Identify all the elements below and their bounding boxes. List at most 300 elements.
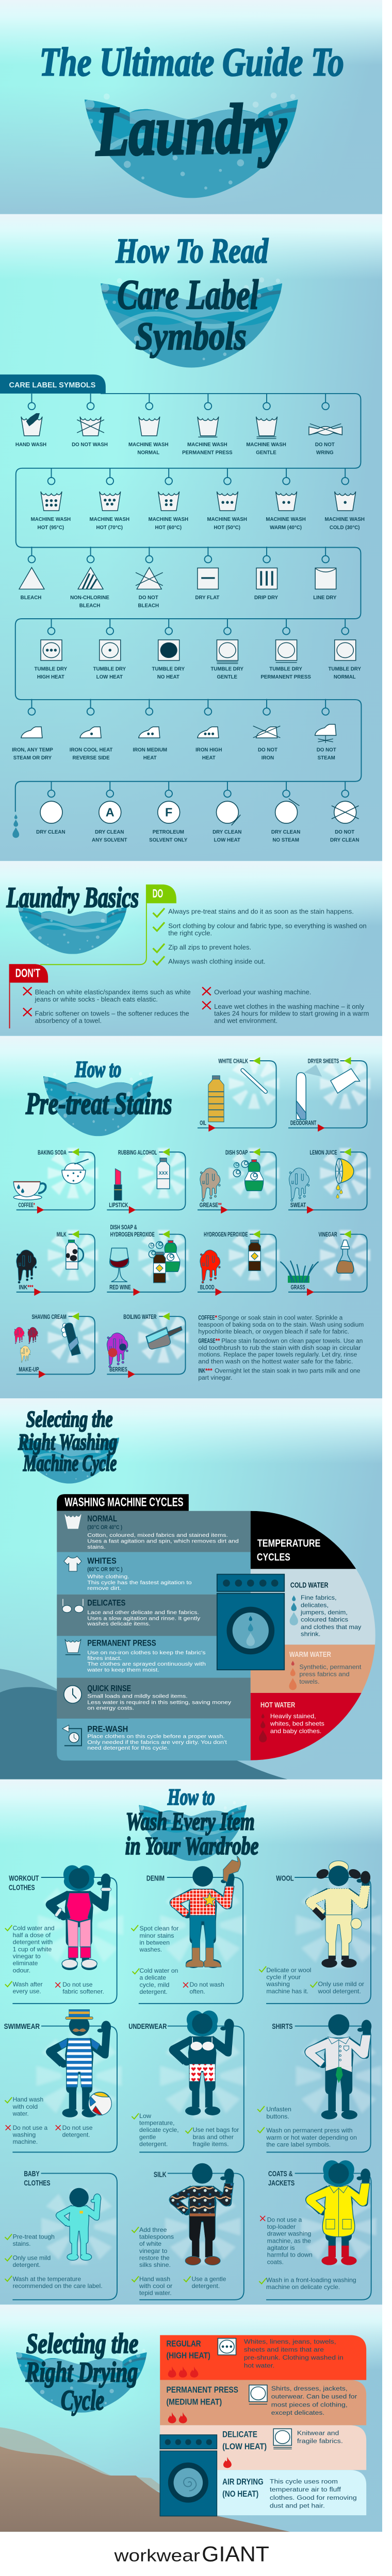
hills bbox=[0, 2427, 290, 2532]
card: silk: Add three bbox=[139, 2227, 167, 2233]
row: delicates: Uses a slow agitation and rinse. It gently bbox=[87, 1616, 201, 1621]
symbol: do not wring bbox=[309, 423, 342, 455]
card: baby clothes: Pre-treat tough bbox=[13, 2233, 55, 2240]
card: shirts: SHIRTS bbox=[272, 2022, 292, 2031]
icon: lemon bbox=[336, 1159, 354, 1198]
icon: three flames bbox=[168, 2366, 198, 2378]
row: delicates: DELICATES bbox=[87, 1598, 125, 1608]
row: iron symbols: HEAT bbox=[202, 755, 216, 761]
row: delicate low heat: Knitwear and bbox=[297, 2429, 339, 2436]
card: sweat and lemon juice bbox=[288, 1148, 367, 1214]
row: dry clean symbols: LOW HEAT bbox=[214, 838, 240, 843]
header: washing machine cycles bbox=[57, 1494, 189, 1511]
notes: stain instructions: INK bbox=[198, 1367, 205, 1374]
row: normal: NORMAL bbox=[87, 1514, 117, 1523]
row: regular high heat: (HIGH HEAT) bbox=[167, 2350, 210, 2360]
figure: coat outfit bbox=[305, 2160, 370, 2265]
red connector bbox=[9, 982, 10, 1028]
card: shirts: Wash on permanent press with bbox=[266, 2127, 353, 2134]
notes: stain instructions: Overnight let the stain soak in two parts milk and one bbox=[215, 1367, 361, 1374]
row: bleach and drying symbols: NON-CHLORINE bbox=[70, 595, 109, 601]
row: dry clean symbols: SOLVENT ONLY bbox=[149, 838, 188, 843]
card: red wine and dish soap with hydrogen peroxide: HYDROGEN PEROXIDE bbox=[110, 1231, 155, 1238]
card: underwear: Low bbox=[139, 2113, 152, 2120]
row: tumble dry symbols: TUMBLE DRY bbox=[328, 666, 361, 672]
segment: cold water: jumpers, denim, bbox=[300, 1609, 348, 1616]
icon: grease stain bbox=[200, 1168, 220, 1201]
segment: cold water: COLD WATER bbox=[290, 1582, 329, 1590]
card: silk: Use a gentle bbox=[192, 2276, 226, 2282]
row: pre-wash bbox=[57, 1719, 251, 1760]
tab: don't: DON'T bbox=[15, 967, 41, 980]
heading: selecting the right drying cycle: Selecting the bbox=[26, 2328, 138, 2359]
row: delicate low heat bbox=[160, 2425, 366, 2470]
list: don't items: Fabric softener on towels – the softener reduces the bbox=[35, 1010, 189, 1018]
row: tumble dry symbols bbox=[35, 619, 361, 680]
card: workout clothes: every use. bbox=[13, 1988, 41, 1995]
row: permanent press medium heat bbox=[160, 2380, 366, 2425]
row: bleach and drying symbols: BLEACH bbox=[79, 603, 100, 609]
row: regular high heat bbox=[160, 2335, 366, 2380]
heading: selecting the right washing machine cycle: Right Washing bbox=[18, 1429, 117, 1455]
notes: stain instructions: hypochlorite bleach, or oxygen bleach if safe for fabric. bbox=[198, 1328, 349, 1335]
row: quick rinse: Less water is required in this setting, saving money bbox=[87, 1700, 232, 1705]
card: silk bbox=[132, 2163, 244, 2300]
row: dry clean symbols: DRY CLEAN bbox=[213, 829, 241, 835]
card: underwear: gentle bbox=[139, 2134, 156, 2141]
card: grass and vinegar: GRASS bbox=[291, 1283, 305, 1291]
card: silk: vinegar to bbox=[139, 2248, 168, 2255]
row: tumble dry symbols: GENTLE bbox=[217, 674, 238, 680]
symbol: machine wash permanent press: MACHINE WASH bbox=[187, 442, 227, 448]
row: bleach and drying symbols: LINE DRY bbox=[313, 595, 337, 601]
tab: care label symbols: CARE LABEL SYMBOLS bbox=[9, 381, 96, 389]
row: permanent press: water to keep them moist. bbox=[87, 1667, 159, 1673]
row: dry clean symbols: DRY CLEAN bbox=[271, 829, 300, 835]
icon: water bowl bbox=[101, 277, 282, 368]
row: permanent press bbox=[57, 1636, 251, 1677]
sunburst backgrounds bbox=[36, 1883, 381, 2264]
card: red wine and dish soap with hydrogen peroxide: DISH SOAP & bbox=[110, 1224, 137, 1231]
icon: blood stain bbox=[200, 1250, 220, 1283]
footer: workwear giant logo bbox=[0, 2532, 382, 2576]
figure: baby outfit bbox=[56, 2188, 101, 2260]
card: red wine and dish soap with hydrogen peroxide bbox=[107, 1224, 185, 1296]
heading: selecting the right drying cycle: Cycle bbox=[61, 2384, 104, 2416]
row: iron symbols: STEAM bbox=[318, 755, 335, 761]
card: workout clothes: half a dose of bbox=[13, 1932, 51, 1939]
symbol: machine wash normal bbox=[128, 417, 169, 455]
card: underwear: delicate cycle, bbox=[139, 2127, 179, 2133]
row: delicate low heat: (LOW HEAT) bbox=[222, 2442, 267, 2451]
notes: stain instructions bbox=[198, 1314, 364, 1381]
heading: how to read: How To Read bbox=[116, 231, 269, 270]
row: temperature symbols: WARM (40°C) bbox=[270, 525, 302, 531]
card: silk: restore the bbox=[139, 2255, 170, 2261]
card: workout clothes: Wash after bbox=[13, 1981, 43, 1988]
card: silk: detergent. bbox=[192, 2283, 220, 2290]
row: air drying no heat: clothes. Good for removing bbox=[270, 2494, 357, 2501]
card: berries and boiling water: BERRIES bbox=[109, 1366, 127, 1373]
icon: water bowl bbox=[19, 1434, 119, 1484]
card: shirts: the care label symbols. bbox=[266, 2141, 331, 2148]
list: don't items: Overload your washing machine. bbox=[214, 989, 311, 996]
card: blood and hydrogen peroxide: HYDROGEN PEROXIDE bbox=[204, 1231, 248, 1238]
row: bleach and drying symbols bbox=[19, 547, 337, 609]
icon: spray bbox=[304, 1064, 322, 1077]
card: wool: washing bbox=[266, 1981, 290, 1988]
segment: cold water: Fine fabrics, bbox=[301, 1595, 337, 1601]
card: workout clothes: detergent with bbox=[13, 1939, 53, 1946]
row: iron symbols: IRON MEDIUM bbox=[133, 748, 167, 753]
icon: dryer machine bbox=[160, 2435, 217, 2516]
row: regular high heat: hot water. bbox=[244, 2362, 274, 2369]
row: regular high heat: sheets and items that are bbox=[244, 2346, 324, 2353]
row: delicates bbox=[57, 1595, 251, 1636]
card: workout clothes: Cold water and bbox=[13, 1925, 55, 1931]
figure: silk outfit bbox=[169, 2163, 234, 2265]
card: swimwear: detergent. bbox=[62, 2131, 90, 2138]
card: shirts bbox=[257, 2014, 371, 2152]
card: denim: cycle, mild bbox=[140, 1981, 169, 1988]
row: iron symbols: DO NOT bbox=[258, 748, 277, 753]
row: normal: Cotton, coloured, mixed fabrics and stained items. bbox=[87, 1533, 228, 1538]
icon: water drops bbox=[12, 815, 19, 838]
figure: underwear outfit bbox=[169, 2010, 234, 2115]
row: dry clean symbols: F bbox=[165, 805, 172, 819]
card: denim: Spot clean for bbox=[140, 1925, 178, 1932]
row: temperature symbols: MACHINE WASH bbox=[31, 517, 71, 522]
row: delicates: Lace and other delicate and fine fabrics. bbox=[87, 1610, 199, 1616]
list: do items: Sort clothing by colour and fabric type, so everything is washed on bbox=[168, 923, 367, 930]
row: temperature symbols: HOT (60°C) bbox=[155, 525, 182, 531]
symbol: machine wash permanent press bbox=[182, 417, 233, 455]
card: red wine and dish soap with hydrogen peroxide: RED WINE bbox=[109, 1283, 131, 1291]
card: workout clothes: fabric softener. bbox=[62, 1989, 104, 1995]
card: underwear: temperature, bbox=[139, 2120, 175, 2126]
tab: don't bbox=[9, 964, 48, 982]
heading: temperature cycles: TEMPERATURE bbox=[257, 1537, 320, 1549]
card: silk: tepid water. bbox=[139, 2290, 172, 2297]
row: whites: This cycle has the fastest agitation to bbox=[87, 1580, 192, 1586]
panel: care label symbols bbox=[0, 214, 382, 861]
row: whites: White clothing. bbox=[87, 1574, 129, 1580]
row: whites: (60°C OR 90°C ) bbox=[87, 1566, 123, 1572]
row: permanent press medium heat: most pieces of clothing, bbox=[271, 2401, 348, 2408]
card: underwear: UNDERWEAR bbox=[128, 2022, 167, 2031]
card: denim: Cold water on bbox=[140, 1968, 178, 1974]
panel: selecting the right washing machine cycle bbox=[0, 1398, 382, 1780]
row: air drying no heat: This cycle uses room bbox=[270, 2478, 338, 2485]
row: tumble dry symbols: TUMBLE DRY bbox=[210, 666, 244, 672]
card: baby clothes bbox=[5, 2170, 117, 2300]
card: make-up and shaving cream: SHAVING CREAM bbox=[31, 1313, 67, 1320]
icon: tub with line bbox=[65, 1639, 81, 1655]
list: don't items: Leave wet clothes in the washing machine – it only bbox=[214, 1003, 365, 1010]
row: permanent press medium heat: except delicates. bbox=[271, 2409, 324, 2416]
card: ink and milk: INK*** bbox=[19, 1283, 34, 1291]
row: temperature symbols: HOT (50°C) bbox=[214, 525, 240, 531]
card: wool: Only use mild or bbox=[318, 1981, 364, 1988]
row: quick rinse: on energy costs. bbox=[87, 1706, 134, 1711]
row: bleach and drying symbols: BLEACH bbox=[138, 603, 159, 609]
icon: t-shirt bbox=[64, 1556, 81, 1571]
heading: selecting the right washing machine cycle bbox=[18, 1406, 117, 1476]
card: oil and white chalk: OIL bbox=[200, 1119, 206, 1126]
list: do items: Always pre-treat stains and do it as soon as the stain happens. bbox=[168, 908, 354, 916]
icon: tub bbox=[65, 1515, 81, 1529]
row: air drying no heat: AIR DRYING bbox=[222, 2477, 264, 2487]
heading: wash every item in your wardrobe: Wash Every Item bbox=[126, 1807, 255, 1835]
figure: shirts outfit bbox=[304, 2014, 371, 2120]
symbol: machine wash normal: MACHINE WASH bbox=[128, 442, 169, 448]
header: washing machine cycles: WASHING MACHINE CYCLES bbox=[64, 1495, 184, 1509]
card: silk: SILK bbox=[154, 2170, 167, 2179]
card: wool: cycle if your bbox=[266, 1974, 301, 1981]
chart: temperature cycles half circle bbox=[251, 1511, 382, 1761]
figure: workout outfit bbox=[46, 1865, 111, 1970]
card: oil and white chalk bbox=[198, 1057, 276, 1132]
row: iron symbols: IRON HIGH bbox=[195, 748, 222, 753]
card: coats and jackets: JACKETS bbox=[268, 2179, 295, 2188]
list: do items bbox=[153, 908, 367, 965]
row: air drying no heat: (NO HEAT) bbox=[222, 2489, 258, 2499]
panel: how to wash every item in your wardrobe bbox=[0, 1780, 382, 2304]
segment: cold water: and clothes that may bbox=[301, 1624, 362, 1631]
panel: laundry basics bbox=[0, 861, 382, 1036]
row: iron symbols: IRON, ANY TEMP bbox=[12, 748, 53, 753]
row: whites bbox=[57, 1552, 251, 1595]
row: delicates: washes delicate items. bbox=[87, 1621, 151, 1627]
list: don't items bbox=[23, 987, 369, 1024]
row: tumble dry symbols: NO HEAT bbox=[157, 674, 179, 680]
icon: oil bottle bbox=[208, 1076, 224, 1122]
row: bleach and drying symbols: DO NOT bbox=[139, 595, 158, 601]
icon: lipstick bbox=[114, 1168, 122, 1200]
notes: stain instructions: teaspoon of baking soda on to the stain. Wash using sodium bbox=[198, 1321, 364, 1328]
row: dry clean symbols: PETROLEUM bbox=[153, 829, 184, 835]
icon: tumble dry gentle bbox=[273, 2429, 292, 2449]
card: coats and jackets: drawer washing bbox=[267, 2231, 311, 2238]
notes: stain instructions: and then wash on the hottest water safe for the fabric. bbox=[198, 1358, 353, 1365]
notes: stain instructions: old toothbrush to rub the stain with dish soap in circular bbox=[198, 1344, 361, 1351]
row: permanent press medium heat: Shirts, dresses, jackets, bbox=[271, 2385, 348, 2392]
heading: selecting the right drying cycle bbox=[25, 2328, 138, 2416]
segment: hot water: Heavily stained, bbox=[270, 1713, 316, 1720]
card: lipstick and rubbing alcohol: RUBBING ALCOHOL bbox=[118, 1149, 157, 1156]
card: sweat and lemon juice: SWEAT bbox=[290, 1201, 306, 1209]
row: tumble dry symbols: TUMBLE DRY bbox=[269, 666, 302, 672]
tab: care label symbols bbox=[0, 375, 106, 394]
card: denim bbox=[131, 1856, 243, 2004]
symbol: machine wash gentle: GENTLE bbox=[256, 450, 276, 455]
row: temperature symbols: HOT (95°C) bbox=[38, 525, 64, 531]
card: wool bbox=[259, 1861, 371, 2004]
symbol: do not wash bbox=[72, 417, 108, 448]
icon: hydrogen peroxide bbox=[249, 1240, 260, 1270]
row: regular high heat: REGULAR bbox=[167, 2339, 201, 2349]
heading: selecting the right washing machine cycle: Selecting the bbox=[26, 1406, 113, 1432]
icon: make-up stains bbox=[14, 1327, 38, 1362]
row: iron symbols: REVERSE SIDE bbox=[73, 755, 110, 761]
card: wool: Delicate or wool bbox=[266, 1967, 311, 1974]
card: deodorant and dryer sheets: DRYER SHEETS bbox=[308, 1057, 339, 1064]
symbol: do not wring: WRING bbox=[316, 450, 334, 455]
card: underwear: bras and other bbox=[193, 2134, 234, 2141]
card: silk: tablespoons bbox=[139, 2233, 174, 2240]
card: coats and jackets: Do not use a bbox=[267, 2216, 302, 2223]
row: dry clean symbols: DRY CLEAN bbox=[95, 829, 124, 835]
card: grass and vinegar: VINEGAR bbox=[319, 1231, 337, 1238]
card: denim: Do not wash bbox=[189, 1981, 224, 1988]
row: air drying no heat: temperature air to fluff bbox=[270, 2486, 341, 2493]
heading: selecting the right washing machine cycle: Machine Cycle bbox=[23, 1450, 117, 1476]
row: temperature symbols: MACHINE WASH bbox=[149, 517, 188, 522]
icon: ink stain bbox=[17, 1250, 37, 1283]
heading: selecting the right drying cycle: Right Drying bbox=[25, 2357, 138, 2388]
heading: wash every item in your wardrobe bbox=[125, 1807, 258, 1860]
card: blood and hydrogen peroxide: BLOOD bbox=[200, 1283, 215, 1291]
card: make-up and shaving cream bbox=[14, 1313, 95, 1378]
list: don't items: Bleach on white elastic/spandex items such as white bbox=[35, 989, 191, 996]
row: delicate low heat: DELICATE bbox=[222, 2429, 257, 2439]
row: dry clean symbols: DO NOT bbox=[335, 829, 354, 835]
card: swimwear: SWIMWEAR bbox=[4, 2022, 40, 2031]
card: grease and dish soap: GREASE** bbox=[200, 1201, 222, 1209]
row: normal bbox=[57, 1511, 251, 1552]
card: blood and hydrogen peroxide bbox=[198, 1230, 276, 1296]
segment: hot water: and baby clothes. bbox=[270, 1728, 321, 1735]
card: lipstick and rubbing alcohol: LIPSTICK bbox=[109, 1201, 128, 1209]
row: air drying no heat: dust and pet hair. bbox=[270, 2502, 325, 2509]
icon: wine glass bbox=[110, 1248, 129, 1282]
row: quick rinse: QUICK RINSE bbox=[87, 1683, 131, 1693]
icon: chalk bbox=[242, 1070, 266, 1092]
notes: stain instructions: motions. Replace the paper towels regularly. Let dry, rinse bbox=[198, 1351, 357, 1358]
heading: temperature cycles bbox=[257, 1537, 320, 1563]
notes: stain instructions: COFFEE bbox=[198, 1314, 215, 1321]
card: shirts: buttons. bbox=[266, 2113, 289, 2120]
row: normal: (30°C OR 40°C ) bbox=[87, 1524, 122, 1531]
icon: water bowl bbox=[18, 903, 127, 954]
symbol: do not wash: DO NOT WASH bbox=[72, 442, 108, 448]
card: silk: with cool or bbox=[139, 2283, 172, 2290]
card: lipstick and rubbing alcohol bbox=[107, 1148, 185, 1214]
card: grease and dish soap: DISH SOAP bbox=[225, 1149, 248, 1156]
hills bbox=[0, 1669, 288, 1780]
card: baby clothes: Wash at the temperature bbox=[13, 2276, 81, 2282]
tab: do bbox=[146, 885, 176, 903]
card: silk: silks shine. bbox=[139, 2262, 171, 2268]
heading: how to: How to bbox=[167, 1784, 215, 1810]
panel: how to pre-treat stains bbox=[0, 1036, 382, 1398]
card: denim: a delicate bbox=[140, 1975, 166, 1981]
card: baby clothes: Only use mild bbox=[13, 2255, 51, 2261]
card: sweat and lemon juice: LEMON JUICE bbox=[310, 1149, 337, 1156]
icon: bubbles bbox=[149, 1242, 163, 1258]
symbol: machine wash gentle: MACHINE WASH bbox=[246, 442, 286, 448]
row: tumble dry symbols: HIGH HEAT bbox=[37, 674, 64, 680]
segment: hot water: HOT WATER bbox=[260, 1701, 295, 1709]
icon: tumble dry high bbox=[218, 2338, 236, 2355]
card: silk: of white bbox=[139, 2241, 161, 2247]
row: regular high heat: pre-shrunk. Clothing washed in bbox=[244, 2354, 344, 2361]
card: coats and jackets: machine on delicate cycle. bbox=[266, 2284, 340, 2291]
card: workout clothes: CLOTHES bbox=[9, 1884, 35, 1892]
icon: bubbles bbox=[233, 1161, 249, 1177]
row: temperature symbols: MACHINE WASH bbox=[90, 517, 129, 522]
segment: cold water: delicates, bbox=[301, 1602, 329, 1608]
heading: symbols: Symbols bbox=[135, 315, 247, 358]
icon: alcohol bottle bbox=[157, 1158, 170, 1189]
list: don't items: and wet environment. bbox=[214, 1017, 277, 1024]
row: bleach and drying symbols: DRIP DRY bbox=[254, 595, 279, 601]
icon: one flame bbox=[223, 2457, 232, 2468]
symbol: hand wash: HAND WASH bbox=[15, 442, 46, 448]
section background: title bbox=[0, 0, 382, 214]
figure: wool outfit bbox=[305, 1861, 370, 1968]
segment: cold water: shrink. bbox=[301, 1631, 320, 1638]
icon: pre-wash clock bbox=[62, 1725, 81, 1745]
icon: coffee cup bbox=[13, 1182, 46, 1200]
heading: how to: How to bbox=[75, 1056, 121, 1082]
card: baby clothes: CLOTHES bbox=[24, 2179, 51, 2188]
footer: workwear giant logo: workwear bbox=[113, 2547, 200, 2566]
row: whites: WHITES bbox=[87, 1556, 117, 1566]
segment: cold water bbox=[290, 1582, 362, 1638]
notes: stain instructions: GREASE bbox=[198, 1337, 216, 1344]
card: coats and jackets: machine, as the bbox=[267, 2238, 311, 2244]
card: coats and jackets bbox=[259, 2160, 371, 2300]
figure: denim outfit bbox=[170, 1856, 241, 1968]
card: wool: machine has it. bbox=[266, 1988, 308, 1995]
icon: milk jug bbox=[66, 1240, 84, 1269]
row: temperature symbols: MACHINE WASH bbox=[324, 517, 365, 522]
icon: dish soap bbox=[161, 1241, 180, 1272]
row: permanent press: PERMANENT PRESS bbox=[87, 1638, 156, 1648]
segment: warm water: press fabrics and bbox=[299, 1671, 350, 1678]
row: quick rinse: Small loads and mildly soiled items. bbox=[87, 1694, 188, 1700]
card: coats and jackets: Wash in a front-loading washing bbox=[266, 2277, 356, 2283]
card: coats and jackets: COATS & bbox=[268, 2170, 293, 2178]
row: delicate low heat: fragile fabrics. bbox=[297, 2437, 343, 2445]
icon: vinegar bottle bbox=[337, 1240, 354, 1273]
row: permanent press: fibres intact. bbox=[87, 1656, 122, 1662]
segment: warm water bbox=[289, 1651, 362, 1690]
notes: stain instructions: Place stain facedown on clean paper towels. Use an bbox=[221, 1337, 363, 1344]
icon: clock bbox=[64, 1686, 81, 1703]
symbol: machine wash gentle bbox=[246, 417, 286, 455]
row: iron symbols: IRON COOL HEAT bbox=[70, 748, 112, 753]
card: workout clothes bbox=[5, 1865, 117, 2004]
icon: beach ball bbox=[88, 2092, 111, 2115]
row: bleach and drying symbols: DRY FLAT bbox=[195, 595, 219, 601]
row: tumble dry symbols: NORMAL bbox=[334, 674, 356, 680]
symbol: hand wash bbox=[15, 413, 46, 448]
card: grass and vinegar bbox=[280, 1230, 367, 1296]
card: baby clothes: stains. bbox=[13, 2241, 31, 2247]
row: dry clean symbols: ANY SOLVENT bbox=[92, 838, 127, 843]
symbol: machine wash normal: NORMAL bbox=[137, 450, 159, 455]
row: pre-wash: PRE-WASH bbox=[87, 1724, 128, 1734]
card: denim: washes. bbox=[139, 1946, 162, 1953]
heading: care label: Care Label bbox=[117, 271, 259, 318]
card: underwear: fragile items. bbox=[193, 2141, 229, 2147]
card: denim: often. bbox=[189, 1989, 205, 1995]
card: ink and milk: MILK bbox=[57, 1231, 67, 1238]
card: berries and boiling water bbox=[107, 1313, 185, 1378]
card: denim: in between bbox=[140, 1939, 170, 1946]
